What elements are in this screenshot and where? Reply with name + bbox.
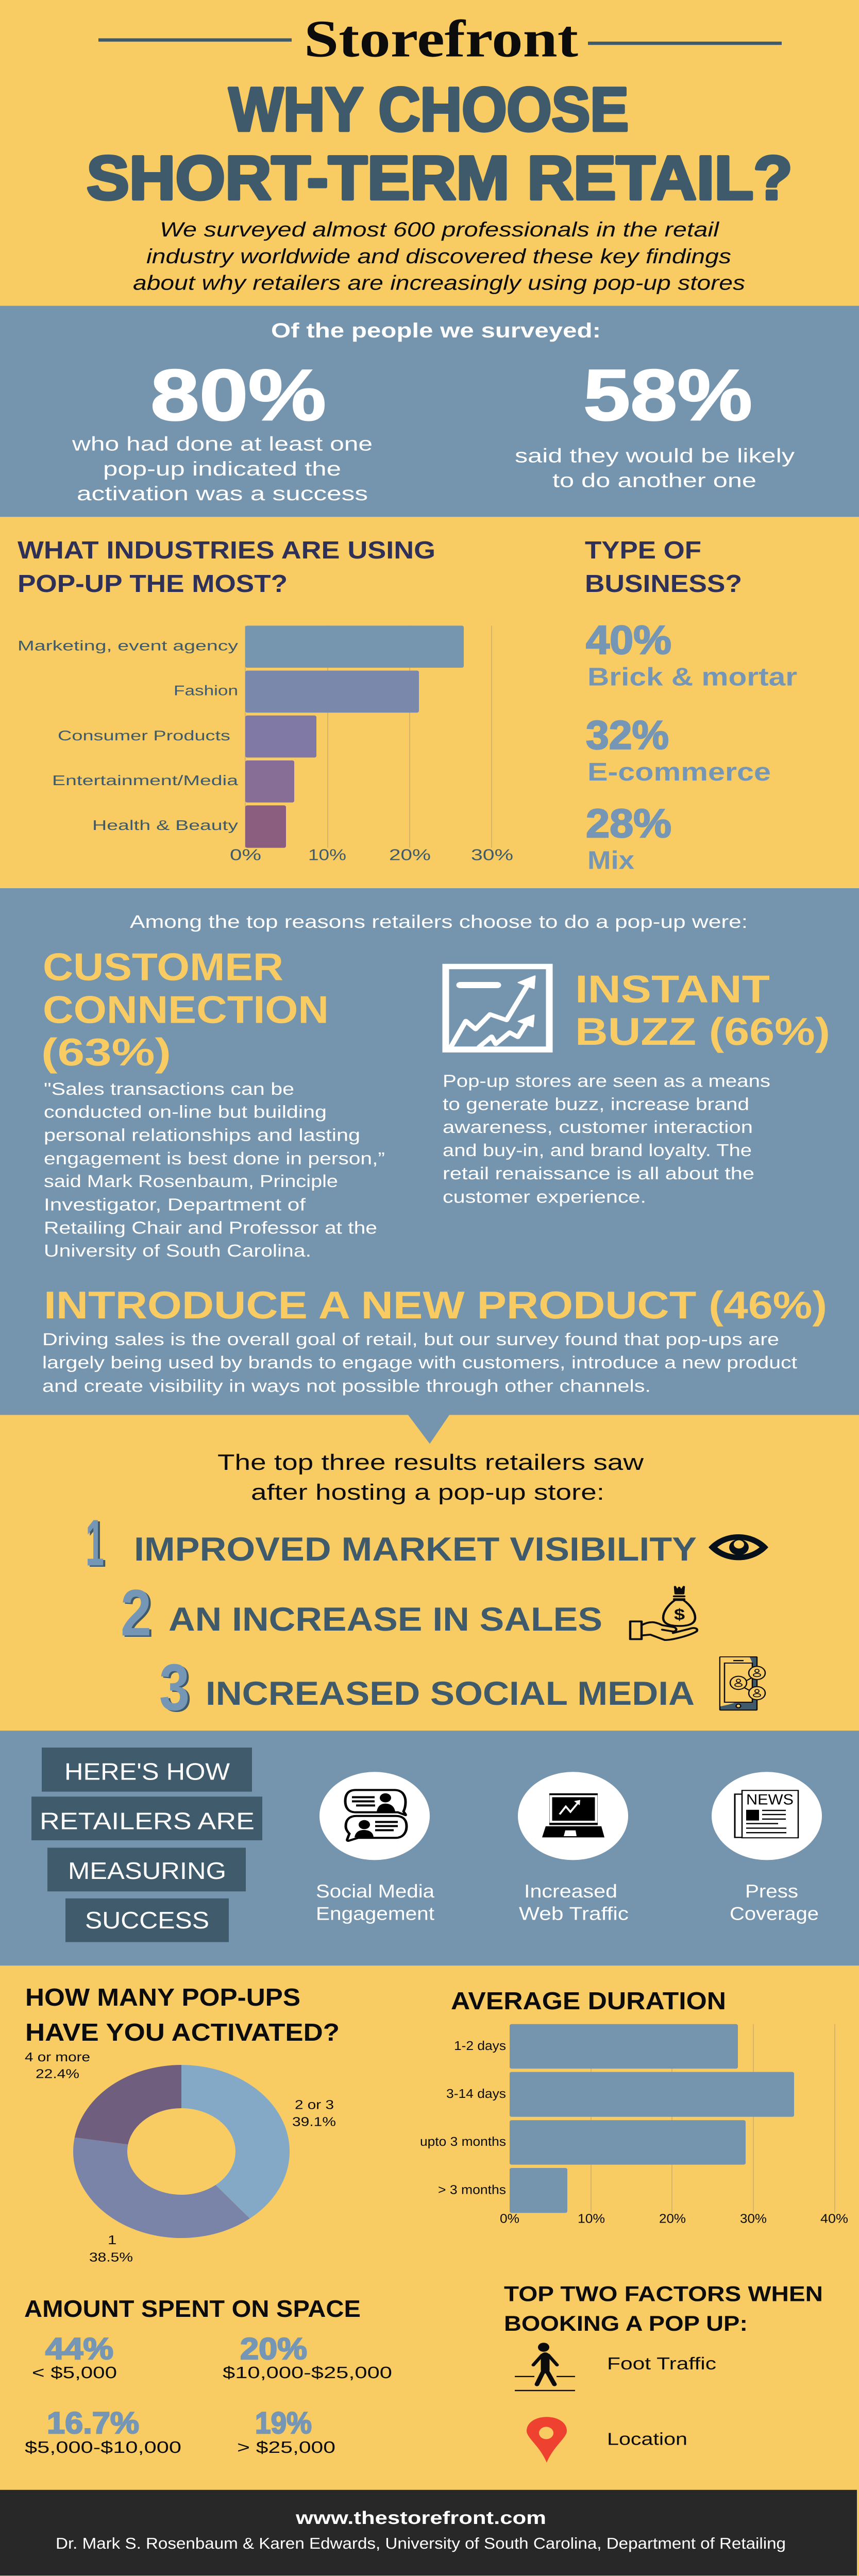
heading: top two factors: TOP TWO FACTORS WHEN xyxy=(504,2282,823,2306)
bar chart: duration: upto 3 months xyxy=(420,2134,506,2148)
bar chart: duration: 20% xyxy=(659,2211,686,2226)
bar chart: industries: 20% xyxy=(389,846,431,864)
result 2: increase in sales: 2 xyxy=(121,1575,151,1650)
icon: hand with money bag: $ xyxy=(674,1606,685,1623)
bar chart: industries: Fashion xyxy=(174,683,238,699)
panel: top three results xyxy=(86,1450,768,1725)
text: quote: engagement is best done in person,” xyxy=(44,1149,385,1168)
text: instant buzz body xyxy=(443,1071,770,1207)
label stack: here's how retailers are measuring success: RETAILERS ARE xyxy=(40,1808,255,1835)
text: introduce body xyxy=(42,1330,797,1396)
footer url: www.thestorefront.com xyxy=(295,2508,546,2528)
stat: 80%: who had done at least one xyxy=(72,433,373,455)
heading: customer connection: CONNECTION xyxy=(43,988,329,1031)
result 1: improved market visibility: 1 xyxy=(86,1505,104,1580)
result 2: increase in sales: AN INCREASE IN SALES xyxy=(169,1601,602,1638)
stat: mix: 28% xyxy=(586,801,671,846)
stat: mix: Mix xyxy=(587,846,634,875)
donut chart: 22.4% xyxy=(36,2066,79,2081)
bar chart: duration: 30% xyxy=(740,2211,767,2226)
donut chart: 4 or more xyxy=(25,2049,90,2064)
intro text: We surveyed almost 600 professionals in the retail xyxy=(160,218,720,241)
stat: brick and mortar: 40% xyxy=(586,617,671,663)
caption: increased web traffic: Web Traffic xyxy=(519,1903,629,1924)
heading: how many pop-ups: HAVE YOU ACTIVATED? xyxy=(25,2019,340,2046)
title xyxy=(87,75,793,212)
header panel xyxy=(87,9,793,294)
bar chart: industries: 0% xyxy=(230,846,261,864)
label: location: Location xyxy=(607,2429,687,2449)
heading: average duration: AVERAGE DURATION xyxy=(451,1987,726,2014)
icon: hand with money bag xyxy=(630,1587,697,1640)
result 3: increased social media: INCREASED SOCIAL MEDIA xyxy=(206,1675,695,1712)
text: introduce body: largely being used by brands to engage with customers, introduce a new product xyxy=(42,1353,797,1372)
heading: how many pop-ups: HOW MANY POP-UPS xyxy=(25,1984,300,2011)
donut chart: 2 or 3 xyxy=(295,2097,334,2112)
caption: social media engagement: Social Media xyxy=(316,1880,435,1902)
bar chart: industries: Entertainment/Media xyxy=(52,773,238,788)
stat: 58%: to do another one xyxy=(552,470,756,492)
text: instant buzz body: and buy-in, and brand loyalty. The xyxy=(443,1141,752,1160)
panel: survey stats xyxy=(0,306,859,517)
text: introduce body: Driving sales is the overall goal of retail, but our survey found that pop-ups are xyxy=(42,1330,779,1349)
bar chart: industries: 30% xyxy=(471,846,513,864)
text: introduce body: and create visibility in ways not possible through other channels. xyxy=(42,1376,651,1396)
stat: 16.7% $5,000-$10,000 xyxy=(25,2406,181,2456)
result 3: increased social media: 3 xyxy=(159,1650,190,1724)
stat: 44% under $5,000: 44% xyxy=(45,2332,113,2366)
stat: 44% under $5,000: < $5,000 xyxy=(32,2364,117,2382)
intro text: industry worldwide and discovered these key findings xyxy=(146,245,731,268)
stat: 80% xyxy=(72,355,373,505)
stat: 19% over $25,000: 19% xyxy=(255,2406,312,2440)
intro text: about why retailers are increasingly using pop-up stores xyxy=(133,271,745,294)
bar chart: duration: 0% xyxy=(500,2211,519,2226)
heading: top three results xyxy=(217,1450,644,1505)
bar chart: industries: Health & Beauty xyxy=(92,818,238,834)
logo: Storefront xyxy=(98,9,782,68)
heading: customer connection: CUSTOMER xyxy=(43,945,283,988)
text: quote: "Sales transactions can be xyxy=(44,1079,294,1098)
heading: type of business: TYPE OF xyxy=(585,536,701,564)
panel: amount spent on space xyxy=(24,2295,392,2456)
bar chart: duration: 10% xyxy=(578,2211,605,2226)
icon: rising chart xyxy=(446,967,549,1050)
stat: e-commerce: E-commerce xyxy=(587,758,771,786)
text: quote: conducted on-line but building xyxy=(44,1102,327,1122)
stat: 58% xyxy=(515,355,795,492)
stat: e-commerce xyxy=(586,712,771,786)
text: quote: personal relationships and lasting xyxy=(44,1125,360,1145)
bar chart: duration: 1-2 days xyxy=(454,2039,506,2053)
text: quote: Investigator, Department of xyxy=(44,1195,306,1214)
text: instant buzz body: customer experience. xyxy=(443,1187,646,1207)
stat: 19% over $25,000 xyxy=(237,2406,335,2456)
stat: 19% over $25,000: > $25,000 xyxy=(237,2438,335,2456)
panel: top reasons xyxy=(0,888,859,1444)
intro text xyxy=(133,218,745,294)
text: quote xyxy=(44,1079,385,1260)
icon: newspaper: NEWS xyxy=(746,1791,794,1808)
bar chart: duration: 3-14 days xyxy=(446,2087,506,2101)
text: instant buzz body: to generate buzz, increase brand xyxy=(443,1094,749,1114)
result 2: increase in sales: 2 xyxy=(123,1577,154,1651)
icon: newspaper xyxy=(712,1772,822,1860)
stat: mix xyxy=(586,801,671,875)
result 3: increased social media: 3 xyxy=(161,1652,192,1725)
heading: customer connection xyxy=(41,945,329,1074)
heading: top three results: after hosting a pop-up store: xyxy=(251,1480,604,1505)
stat: 58%: 58% xyxy=(583,355,752,436)
text: instant buzz body: awareness, customer interaction xyxy=(443,1117,753,1137)
result 2: increase in sales xyxy=(121,1575,697,1651)
icon: pedestrian xyxy=(515,2343,575,2391)
text: instant buzz body: retail renaissance is all about the xyxy=(443,1163,754,1183)
bar chart: industries xyxy=(18,625,513,864)
stat: brick and mortar: Brick & mortar xyxy=(587,663,797,691)
heading: type of business xyxy=(585,536,742,597)
title: WHY CHOOSE xyxy=(229,75,629,144)
label: foot traffic: Foot Traffic xyxy=(607,2354,716,2373)
panel: pop-up count donut xyxy=(25,1984,340,2264)
label stack: here's how retailers are measuring success xyxy=(31,1748,262,1942)
heading: what industries: POP-UP THE MOST? xyxy=(18,570,288,597)
stat: 20% $10,000-$25,000: $10,000-$25,000 xyxy=(223,2364,392,2382)
stat: 80%: 80% xyxy=(150,355,326,436)
heading: top two factors xyxy=(504,2282,823,2336)
heading: amount spent: AMOUNT SPENT ON SPACE xyxy=(24,2295,361,2322)
logo: Storefront: Storefront xyxy=(304,9,578,68)
stat: 58%: said they would be likely xyxy=(515,445,795,467)
panel: average duration xyxy=(420,1987,848,2226)
bar chart: duration: > 3 months xyxy=(438,2182,506,2197)
donut chart: 39.1% xyxy=(292,2114,336,2129)
label stack: here's how retailers are measuring success: MEASURING xyxy=(68,1858,226,1885)
result 1: improved market visibility xyxy=(86,1505,768,1581)
result 1: improved market visibility: IMPROVED MARKET VISIBILITY xyxy=(134,1531,697,1568)
stat: brick and mortar xyxy=(586,617,797,691)
stat: 16.7% $5,000-$10,000: 16.7% xyxy=(47,2406,139,2440)
panel: top two factors xyxy=(504,2282,823,2463)
caption: press coverage: Coverage xyxy=(730,1903,819,1924)
stat: 44% under $5,000 xyxy=(32,2332,117,2382)
heading: what industries: WHAT INDUSTRIES ARE USING xyxy=(18,536,435,564)
label stack: here's how retailers are measuring success: SUCCESS xyxy=(85,1907,209,1934)
label stack: here's how retailers are measuring success: HERE'S HOW xyxy=(64,1758,230,1785)
bar chart: industries: Marketing, event agency xyxy=(18,638,238,654)
icon: eye xyxy=(709,1534,768,1560)
heading: instant buzz: INSTANT xyxy=(575,968,770,1011)
icon: laptop with chart xyxy=(518,1772,628,1860)
donut chart: 38.5% xyxy=(89,2250,133,2264)
stat: 80%: pop-up indicated the xyxy=(103,459,341,480)
footer xyxy=(0,2490,857,2575)
panel: industries and business type xyxy=(18,536,797,875)
bar chart: duration xyxy=(420,2024,848,2226)
caption: increased web traffic: Increased xyxy=(524,1880,617,1902)
heading: top three results: The top three results retailers saw xyxy=(217,1450,644,1475)
stat: 80%: activation was a success xyxy=(77,483,368,505)
heading: instant buzz: BUZZ (66%) xyxy=(575,1010,830,1053)
stat: e-commerce: 32% xyxy=(586,712,669,757)
donut chart xyxy=(25,2049,336,2264)
text: quote: Retailing Chair and Professor at the xyxy=(44,1218,377,1238)
heading: type of business: BUSINESS? xyxy=(585,570,742,597)
result 1: improved market visibility: 1 xyxy=(88,1507,106,1581)
heading: how many pop-ups xyxy=(25,1984,340,2046)
result 3: increased social media xyxy=(159,1650,765,1725)
icon: location pin xyxy=(527,2417,567,2463)
bar chart: duration: 40% xyxy=(820,2211,848,2226)
stat: 20% $10,000-$25,000 xyxy=(223,2332,392,2382)
bar chart: industries: Consumer Products xyxy=(58,728,230,743)
heading: customer connection: (63%) xyxy=(41,1030,171,1074)
heading: of the people we surveyed: Of the people we surveyed: xyxy=(271,319,601,342)
caption: social media engagement xyxy=(316,1880,435,1924)
bar chart: industries: 10% xyxy=(308,846,346,864)
text: quote: said Mark Rosenbaum, Principle xyxy=(44,1172,338,1191)
caption: press coverage xyxy=(730,1880,819,1924)
donut chart: 1 xyxy=(108,2233,116,2247)
stat: 20% $10,000-$25,000: 20% xyxy=(240,2332,307,2366)
panel: measuring success xyxy=(0,1731,859,1965)
stat: 16.7% $5,000-$10,000: $5,000-$10,000 xyxy=(25,2438,181,2456)
text: instant buzz body: Pop-up stores are seen as a means xyxy=(443,1071,770,1091)
heading: top two factors: BOOKING A POP UP: xyxy=(504,2312,748,2336)
heading: instant buzz xyxy=(575,968,830,1053)
icon: speech bubbles xyxy=(319,1772,430,1860)
text: quote: University of South Carolina. xyxy=(44,1241,311,1260)
intro line: among the top reasons: Among the top reasons retailers choose to do a pop-up were: xyxy=(130,912,748,932)
heading: what industries xyxy=(18,536,435,597)
caption: social media engagement: Engagement xyxy=(316,1903,434,1924)
caption: increased web traffic xyxy=(519,1880,629,1924)
caption: press coverage: Press xyxy=(745,1880,798,1902)
icon: phone with social network xyxy=(720,1657,765,1710)
